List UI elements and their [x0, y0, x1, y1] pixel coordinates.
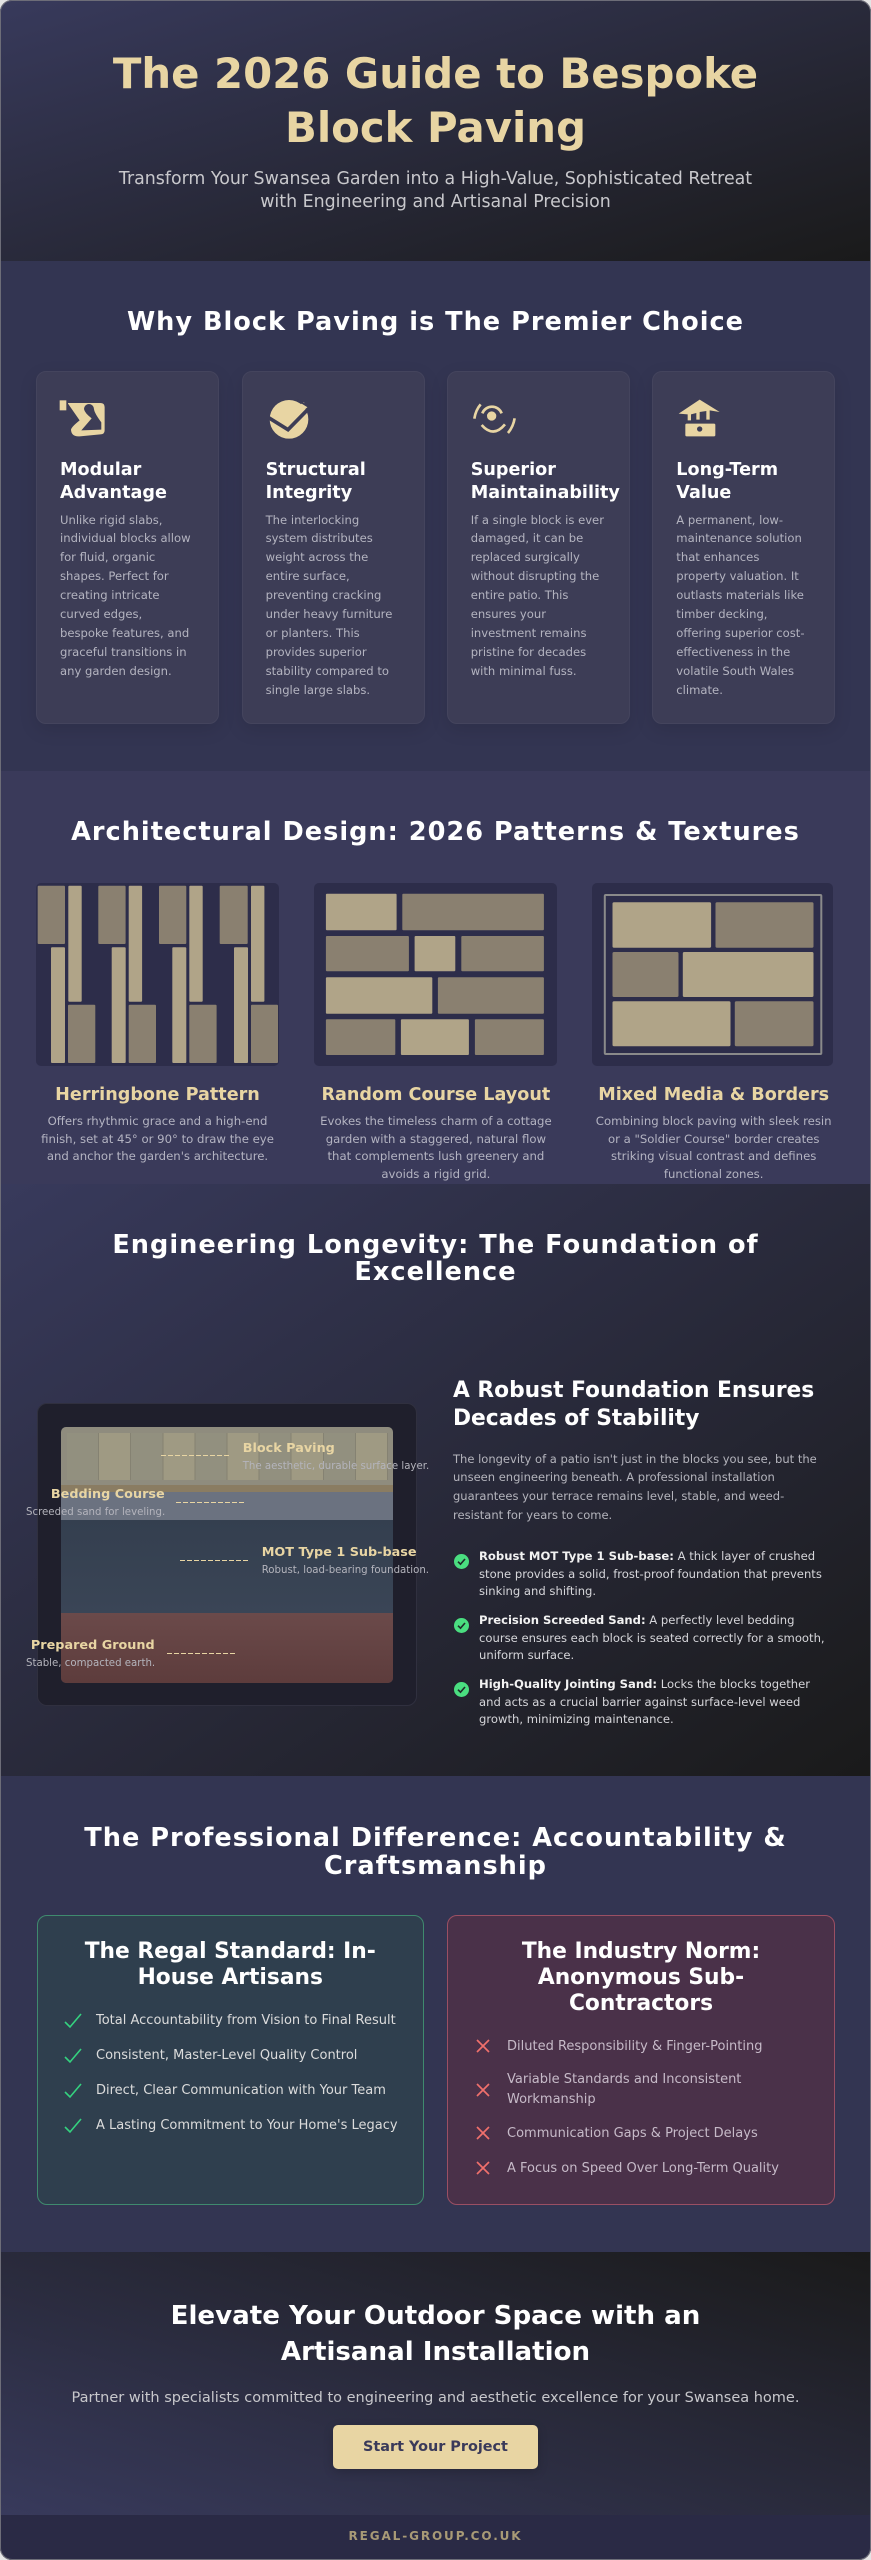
pattern description: striking visual contrast and defines [611, 1149, 816, 1163]
pattern description: avoids a rigid grid. [381, 1167, 490, 1181]
pattern description: Combining block paving with sleek resin [596, 1114, 832, 1128]
dashed leader: MOT sub-base [180, 1560, 250, 1561]
CTA heading: Artisanal Installation [281, 2337, 590, 2367]
card text: provides superior [266, 645, 367, 659]
card text: pristine for decades [471, 645, 586, 659]
drawback: responsibility: Diluted Responsibility & Finger-Pointing [507, 2038, 762, 2054]
card text: If a single block is ever [471, 512, 604, 526]
pattern title: Mixed Media & Borders [598, 1085, 829, 1105]
card text: shapes. Perfect for [60, 569, 169, 583]
panel: why block paving [0, 261, 871, 771]
card text: A permanent, low- [676, 512, 783, 526]
drawback: speed: A Focus on Speed Over Long-Term Quality [507, 2161, 779, 2176]
layer: bedding course [61, 1492, 393, 1520]
label: block paving: Block Paving [243, 1441, 335, 1456]
card: long-term value [652, 371, 835, 724]
subheading: robust foundation: Decades of Stability [453, 1406, 699, 1431]
card title: The Industry Norm: [522, 1939, 760, 1964]
pattern description [320, 1114, 552, 1181]
label: block paving [242, 1441, 429, 1472]
icon: green check [454, 1682, 469, 1697]
pattern description: Evokes the timeless charm of a cottage [320, 1114, 552, 1128]
heading: foundation of excellence: Engineering Longevity: The Foundation of [112, 1230, 759, 1260]
card title [471, 460, 620, 503]
paragraph: longevity: unseen engineering beneath. A professional installation [453, 1470, 775, 1484]
card text: property valuation. It [676, 569, 799, 583]
list item: MOT sub-base [454, 1549, 822, 1598]
pattern description: functional zones. [664, 1167, 763, 1181]
item text: course ensures each block is seated correctly for a smooth, [479, 1630, 825, 1644]
title: The 2026 Guide to Bespoke [113, 49, 758, 98]
icon: green check [454, 1554, 469, 1569]
layer: bedding sand strip [61, 1485, 393, 1492]
card text: for fluid, organic [60, 550, 155, 564]
pattern description: that complements lush greenery and [327, 1149, 544, 1163]
card title: The Regal Standard: In- [85, 1939, 376, 1964]
card title: Contractors [569, 1991, 713, 2016]
item text [479, 1549, 822, 1598]
card text: with minimal fuss. [471, 664, 577, 678]
card title: House Artisans [138, 1965, 323, 1990]
card: modular advantage [36, 371, 219, 724]
icon: maintenance cycle [473, 404, 516, 434]
benefit: quality control: Consistent, Master-Level Quality Control [96, 2048, 357, 2062]
item text: Robust MOT Type 1 Sub-base: A thick layer of crushed [479, 1549, 815, 1563]
card text: maintenance solution [676, 531, 802, 545]
card text: replaced surgically [471, 550, 580, 564]
card title: Integrity [266, 483, 352, 503]
CTA heading [0, 2298, 871, 2370]
card text: without disrupting the [471, 569, 599, 583]
card text: investment remains [471, 626, 586, 640]
card text [676, 512, 805, 697]
card title [676, 460, 778, 503]
pattern card: random course [314, 883, 557, 1181]
item text: and acts as a crucial barrier against surface-level weed [479, 1694, 800, 1708]
icon: shield check [270, 400, 308, 439]
list item: screeded sand [454, 1613, 825, 1662]
title: Block Paving [285, 103, 586, 152]
pattern card: mixed media [592, 883, 833, 1181]
heading: foundation of excellence [112, 1230, 759, 1286]
label: prepared ground: Prepared Ground [31, 1638, 155, 1653]
icon: modular blocks [60, 400, 105, 436]
card title: Advantage [60, 483, 167, 503]
card text: outlasts materials like [676, 588, 804, 602]
paragraph: longevity: The longevity of a patio isn't just in the blocks you see, but the [453, 1452, 817, 1466]
label: MOT sub-base [262, 1545, 429, 1576]
panel: architectural design [0, 771, 871, 1184]
label: MOT sub-base: Robust, load-bearing foundation. [262, 1565, 429, 1576]
CTA heading: Elevate Your Outdoor Space with an [171, 2301, 700, 2331]
paragraph: longevity [452, 1452, 817, 1522]
layer: MOT sub-base [61, 1520, 393, 1613]
card title [60, 460, 167, 503]
drawback: standards: Workmanship [507, 2092, 596, 2107]
item text: Precision Screeded Sand: A perfectly level bedding [479, 1613, 794, 1627]
paragraph: longevity: resistant for years to come. [453, 1508, 612, 1522]
label: bedding course: Screeded sand for leveling. [26, 1507, 165, 1518]
header panel [0, 0, 871, 261]
card text: offering superior cost- [676, 626, 805, 640]
card title [266, 460, 366, 503]
card text: individual blocks allow [60, 531, 191, 545]
comparison card: regal standard [36, 1915, 424, 2205]
subtitle [118, 169, 752, 212]
benefit: accountability: Total Accountability from Vision to Final Result [96, 2012, 396, 2028]
card text: preventing cracking [266, 588, 381, 602]
drawback: standards [507, 2070, 741, 2110]
item text: uniform surface. [479, 1648, 574, 1662]
title [113, 49, 758, 152]
card text: stability compared to [266, 664, 389, 678]
heading: foundation of excellence: Excellence [354, 1256, 517, 1286]
card text: system distributes [266, 531, 373, 545]
card text: that enhances [676, 550, 759, 564]
CTA button [333, 2425, 538, 2469]
layer: block paving [61, 1427, 393, 1485]
card title [448, 1939, 834, 2017]
card title: Superior [471, 460, 556, 480]
item text: stone provides a solid, frost-proof foundation that prevents [479, 1566, 822, 1580]
subtitle: with Engineering and Artisanal Precision [260, 192, 611, 212]
card text: weight across the [266, 550, 368, 564]
icon: house value [678, 400, 720, 436]
card: superior maintainability [447, 371, 630, 724]
subtitle: Transform Your Swansea Garden into a High-Value, Sophisticated Retreat [119, 169, 752, 189]
card title: Maintainability [471, 483, 620, 503]
dashed leader: bedding course [176, 1502, 246, 1503]
card text: ensures your [471, 607, 546, 621]
pattern description: and anchor the garden's architecture. [47, 1149, 268, 1163]
card text: any garden design. [60, 664, 172, 678]
pattern description: finish, set at 45° or 90° to draw the eye [41, 1132, 274, 1146]
card text: damaged, it can be [471, 531, 583, 545]
card text: entire surface, [266, 569, 350, 583]
card text: climate. [676, 683, 723, 697]
card text [60, 512, 191, 678]
pattern description: or a "Soldier Course" border creates [608, 1132, 819, 1146]
comparison card: industry norm [447, 1915, 835, 2205]
CTA button: Start Your Project [363, 2439, 508, 2455]
item text: High-Quality Jointing Sand: Locks the blocks together [479, 1677, 810, 1691]
herringbone pattern graphic [36, 883, 279, 1066]
card text: volatile South Wales [676, 664, 794, 678]
item text: sinking and shifting. [479, 1584, 596, 1598]
card text [266, 512, 392, 697]
footer url: REGAL-GROUP.CO.UK [348, 2529, 523, 2543]
card title: Long-Term [676, 460, 778, 480]
label: prepared ground: Stable, compacted earth. [26, 1658, 155, 1669]
label: bedding course [26, 1487, 165, 1518]
pattern description [41, 1114, 274, 1163]
CTA text: Partner with specialists committed to engineering and aesthetic excellence for your Swansea home. [72, 2390, 799, 2406]
card text: curved edges, [60, 607, 142, 621]
pattern description: Offers rhythmic grace and a high-end [48, 1114, 267, 1128]
benefit: communication: Direct, Clear Communication with Your Team [96, 2082, 386, 2098]
heading: premier choice: Why Block Paving is The Premier Choice [127, 307, 744, 337]
paving blocks [67, 1433, 388, 1480]
dashed leader: prepared ground [167, 1652, 237, 1654]
card text: creating intricate [60, 588, 160, 602]
card: structural integrity [242, 371, 425, 724]
card text: The interlocking [266, 512, 359, 526]
subheading: robust foundation [453, 1378, 814, 1431]
heading: accountability and craftsmanship: The Professional Difference: Accountability & [84, 1822, 787, 1852]
card title: Anonymous Sub- [538, 1965, 744, 1990]
pattern description [596, 1114, 832, 1181]
diagram: paving layers [37, 1403, 417, 1706]
heading: accountability and craftsmanship [84, 1822, 787, 1880]
pattern title: Herringbone Pattern [55, 1085, 260, 1105]
pattern description: garden with a staggered, natural flow [326, 1132, 546, 1146]
pattern title: Random Course Layout [321, 1085, 550, 1105]
label: block paving: The aesthetic, durable surface layer. [243, 1461, 429, 1472]
heading: patterns and textures: Architectural Design: 2026 Patterns & Textures [71, 817, 800, 847]
layer stack [61, 1427, 393, 1683]
label: bedding course: Bedding Course [51, 1487, 165, 1502]
card text: graceful transitions in [60, 645, 187, 659]
card text: effectiveness in the [676, 645, 790, 659]
subheading: robust foundation: A Robust Foundation Ensures [453, 1378, 814, 1403]
paragraph: longevity: guarantees your terrace remains level, stable, and weed- [453, 1489, 784, 1503]
drawback: standards: Variable Standards and Inconsistent [507, 2072, 741, 2087]
label: prepared ground [26, 1638, 155, 1669]
card text: Unlike rigid slabs, [60, 512, 162, 526]
drawback: communication: Communication Gaps & Project Delays [507, 2126, 758, 2141]
random course pattern graphic [314, 883, 557, 1066]
panel: professional difference [0, 1776, 871, 2252]
layer: prepared ground [61, 1613, 393, 1683]
item text [479, 1613, 825, 1662]
card text: bespoke features, and [60, 626, 189, 640]
panel: call to action [0, 2252, 871, 2515]
heading: accountability and craftsmanship: Craftsmanship [324, 1850, 547, 1880]
item text: growth, minimizing maintenance. [479, 1712, 674, 1726]
card title [38, 1939, 423, 1991]
card text: under heavy furniture [266, 607, 392, 621]
card text: entire patio. This [471, 588, 568, 602]
benefit: commitment: A Lasting Commitment to Your Home's Legacy [96, 2118, 398, 2132]
card text: timber decking, [676, 607, 768, 621]
icon: green check [454, 1618, 469, 1633]
list item: jointing sand [454, 1677, 810, 1726]
footer [0, 2515, 871, 2560]
item text [479, 1677, 810, 1726]
card title: Value [676, 483, 731, 503]
dashed leader: block paving [161, 1455, 231, 1456]
card title: Modular [60, 460, 141, 480]
card text: single large slabs. [266, 683, 370, 697]
mixed media pattern graphic [592, 883, 833, 1066]
panel: engineering longevity [0, 1184, 871, 1776]
pattern card: herringbone [36, 883, 279, 1163]
card text [471, 512, 604, 678]
card title: Structural [266, 460, 366, 480]
card text: or planters. This [266, 626, 360, 640]
label: MOT sub-base: MOT Type 1 Sub-base [262, 1545, 417, 1560]
